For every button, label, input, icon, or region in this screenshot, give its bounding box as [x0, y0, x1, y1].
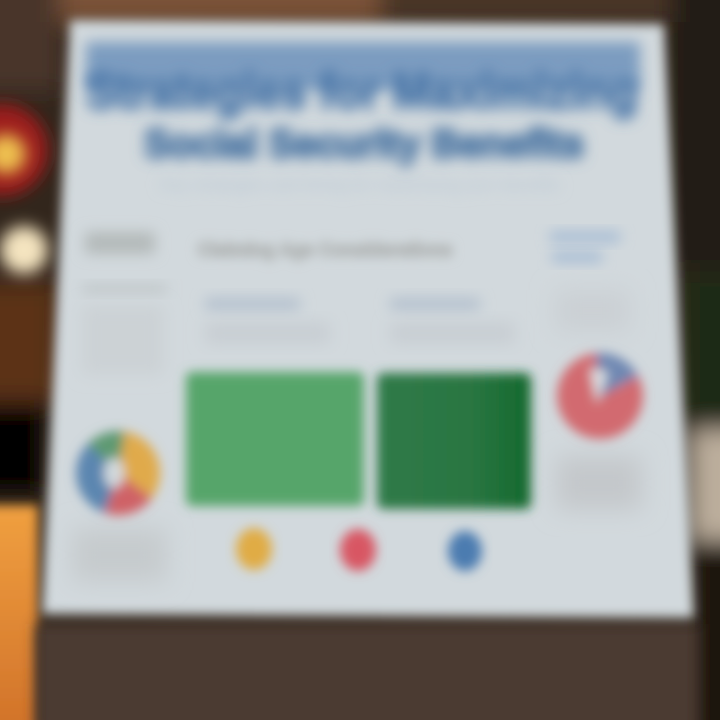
pie chart: right	[557, 353, 643, 439]
left column	[72, 232, 167, 582]
panel: dark green	[377, 373, 531, 509]
panel: light green	[186, 372, 364, 506]
title: Strategies for Maximizing	[86, 63, 638, 119]
icon: yellow circle	[236, 528, 272, 570]
subtitle: Key strategies and timing for maximizing your benefits	[160, 177, 560, 194]
title: Social Security Benefits	[144, 122, 584, 166]
orange lamp glow	[0, 505, 38, 720]
wooden table	[36, 624, 698, 720]
title	[86, 42, 640, 166]
section heading: Claiming Age Considerations	[198, 240, 452, 261]
icon: red circle	[340, 529, 376, 571]
icon: blue circle	[448, 531, 482, 571]
right column	[550, 232, 642, 510]
poster sheet	[42, 20, 694, 618]
left bokeh lights	[0, 104, 48, 274]
column headings and text	[205, 298, 515, 344]
pie chart: left	[76, 431, 160, 515]
